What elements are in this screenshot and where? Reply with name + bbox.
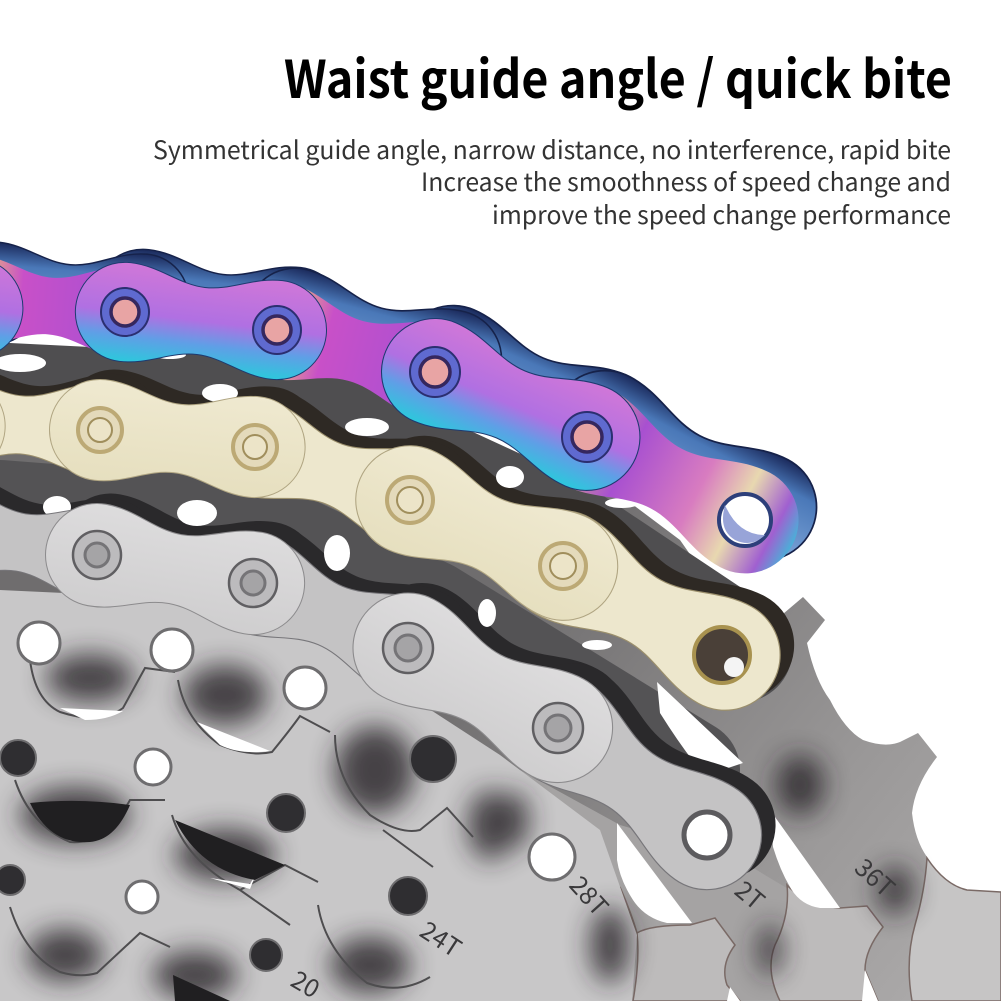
dark openings between teeth: [30, 801, 285, 1001]
cassette sprockets: [0, 345, 1001, 1001]
gold pins: [78, 408, 586, 589]
rainbow pins: [101, 288, 612, 462]
gold end hole light: [724, 657, 744, 677]
rainbow end plate: [515, 365, 817, 592]
silver chain: [0, 462, 797, 911]
silver far plates: [0, 467, 797, 901]
gold pin centres: [88, 418, 576, 579]
sprocket holes: [18, 622, 575, 913]
tooth count labels: 28T: [562, 867, 617, 923]
silver pin centres: [85, 543, 571, 741]
sprocket: 32T body: [520, 770, 790, 1001]
sprocket: 32T tooth: [771, 885, 883, 1001]
rainbow inner plates: [0, 251, 494, 432]
sprocket: 36T lower tooth: [909, 858, 1001, 1001]
sprocket valley edges: [10, 660, 473, 988]
rainbow pin centres: [111, 298, 602, 452]
tooth count labels: 2T: [728, 872, 773, 918]
white gaps between sprockets: [60, 682, 878, 1001]
gold far plates: [0, 361, 814, 720]
gaps under rainbow chain: [0, 351, 639, 508]
sprocket: 28T tooth: [620, 887, 740, 1001]
silver inner plates: [0, 477, 783, 911]
silver outer links: [0, 462, 632, 802]
gaps under gold chain: [43, 496, 612, 650]
gold outer links: [0, 355, 635, 637]
tooth count labels: 36T: [848, 849, 904, 905]
gold inner plates: [0, 371, 800, 730]
rainbow outer links: [0, 234, 657, 507]
tooth count labels: [285, 849, 904, 1001]
rainbow far plates: [0, 221, 835, 579]
description text: [153, 131, 951, 232]
tooth count labels: 24T: [414, 912, 469, 965]
description text: Increase the smoothness of speed change and: [421, 163, 951, 199]
dark band behind silver chain: [0, 510, 690, 770]
silver end hole: [684, 812, 730, 858]
gold end hole: [694, 627, 750, 683]
sprocket: front light gears: [0, 590, 637, 1001]
description text: improve the speed change performance: [492, 196, 951, 232]
sprocket: largest 36T: [0, 345, 1001, 1001]
gold chain: [0, 351, 814, 730]
dark band behind gold chain: [0, 395, 740, 650]
rainbow end hole: [719, 494, 771, 546]
dark sprocket holes: [0, 736, 456, 971]
silver pins: [73, 531, 583, 753]
description text: Symmetrical guide angle, narrow distance, no interference, rapid bite: [153, 131, 951, 167]
rainbow chain: [0, 221, 835, 592]
rainbow end hole inner wall: [723, 505, 765, 543]
soft shading in tooth valleys: [20, 654, 913, 999]
